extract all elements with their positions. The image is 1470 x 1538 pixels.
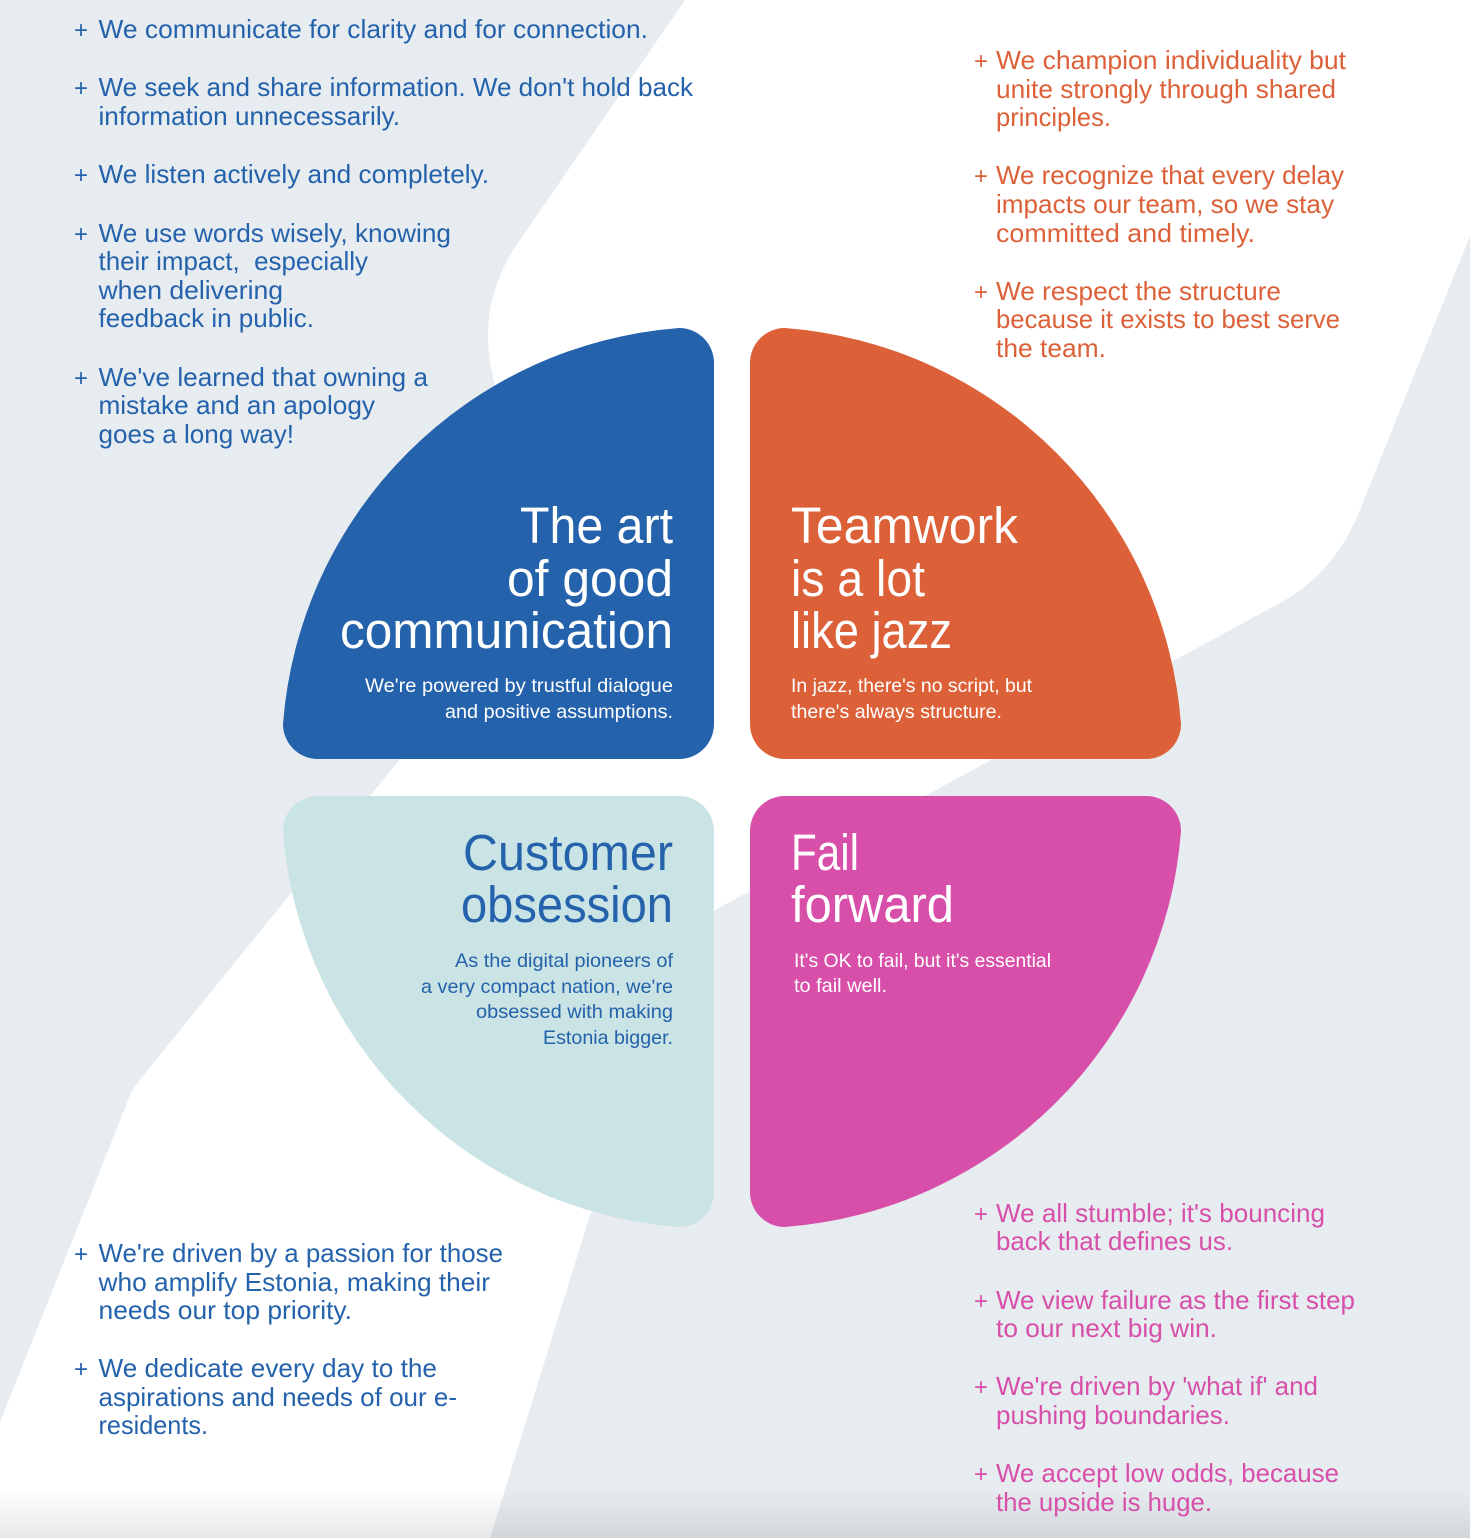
list: communication principles: + — [74, 17, 88, 44]
panel: the art of good communication — [283, 328, 714, 759]
description: communication: and positive assumptions. — [445, 701, 673, 723]
list: teamwork principles: + — [974, 279, 988, 306]
heading: Fail forward: Fail — [791, 824, 859, 881]
heading: Customer obsession: Customer — [463, 824, 673, 881]
list: fail forward principles — [974, 1198, 1355, 1517]
heading: Teamwork is a lot like jazz: is a lot — [791, 550, 925, 607]
list: fail forward principles: to our next big win. — [996, 1313, 1217, 1343]
heading: The art of good communication: The art — [520, 497, 673, 554]
list: customer principles: We dedicate every day to the — [98, 1353, 437, 1383]
list: teamwork principles: principles. — [996, 102, 1111, 132]
list: fail forward principles: + — [974, 1374, 988, 1401]
bottom shading — [0, 1488, 1470, 1538]
list: communication principles: their impact, especially — [98, 246, 368, 276]
list: communication principles: feedback in public. — [98, 303, 314, 333]
list: fail forward principles: back that defines us. — [996, 1226, 1233, 1256]
list: customer principles: aspirations and needs of our e- — [98, 1382, 457, 1412]
quadrant shape: orange — [750, 328, 1181, 759]
description: customer: a very compact nation, we're — [421, 976, 673, 998]
heading: Customer obsession — [461, 824, 673, 933]
list: teamwork principles: We respect the structure — [996, 276, 1281, 306]
list: communication principles: information unnecessarily. — [98, 101, 400, 131]
list: communication principles — [74, 14, 694, 449]
list: customer principles: We're driven by a passion for those — [98, 1238, 503, 1268]
list: communication principles: We communicate for clarity and for connection. — [98, 14, 648, 44]
list: fail forward principles: We view failure as the first step — [996, 1285, 1355, 1315]
heading: The art of good communication: communication — [340, 602, 673, 659]
description: fail forward: to fail well. — [794, 975, 887, 997]
list: teamwork principles: the team. — [996, 333, 1106, 363]
list: communication principles: We use words wisely, knowing — [98, 218, 451, 248]
heading: Customer obsession: obsession — [461, 876, 673, 933]
description: customer: Estonia bigger. — [543, 1027, 673, 1049]
list: customer principles: who amplify Estonia, making their — [97, 1267, 490, 1297]
list: communication principles: when delivering — [97, 275, 283, 305]
list: customer principles: residents. — [98, 1410, 208, 1440]
list: teamwork principles: We champion individuality but — [996, 45, 1347, 75]
list: communication principles: We listen actively and completely. — [98, 159, 489, 189]
description: teamwork: In jazz, there's no script, but — [791, 675, 1033, 697]
list: teamwork principles: We recognize that every delay — [996, 160, 1344, 190]
heading: Fail forward: forward — [791, 876, 954, 933]
list: customer principles: + — [74, 1356, 88, 1383]
description: communication: We're powered by trustful dialogue — [365, 675, 673, 697]
description: customer — [421, 950, 674, 1049]
description: customer: obsessed with making — [476, 1001, 673, 1023]
list: teamwork principles: + — [974, 163, 988, 190]
list: communication principles: mistake and an apology — [98, 390, 375, 420]
heading: The art of good communication: of good — [507, 550, 673, 607]
description: fail forward — [794, 950, 1051, 997]
description: teamwork — [791, 675, 1033, 723]
list: communication principles: + — [74, 162, 88, 189]
heading: Teamwork is a lot like jazz: like jazz — [791, 602, 952, 659]
list: fail forward principles: + — [974, 1461, 988, 1488]
list: teamwork principles: impacts our team, so we stay — [996, 189, 1334, 219]
list: fail forward principles: We accept low odds, because — [996, 1458, 1339, 1488]
quadrant shape: blue — [283, 328, 714, 759]
list: fail forward principles: We're driven by 'what if' and — [996, 1371, 1318, 1401]
background: upper-left grey shape — [0, 0, 685, 1422]
heading: Teamwork is a lot like jazz: Teamwork — [791, 497, 1018, 554]
list: customer principles: needs our top priority. — [98, 1295, 352, 1325]
description: customer: As the digital pioneers of — [455, 950, 674, 972]
description: communication — [365, 675, 673, 723]
list: customer principles: + — [74, 1241, 88, 1268]
panel: fail forward — [750, 796, 1181, 1227]
heading: Fail forward — [791, 824, 954, 933]
list: communication principles: We've learned that owning a — [98, 362, 429, 392]
panel: teamwork is a lot like jazz — [750, 328, 1181, 759]
list: teamwork principles: because it exists to best serve — [996, 304, 1340, 334]
list: fail forward principles: the upside is huge. — [996, 1487, 1212, 1517]
list: fail forward principles: We all stumble; it's bouncing — [996, 1198, 1325, 1228]
description: teamwork: there's always structure. — [791, 701, 1002, 723]
heading: Teamwork is a lot like jazz — [791, 497, 1018, 659]
list: fail forward principles: pushing boundaries. — [996, 1400, 1230, 1430]
list: fail forward principles: + — [974, 1288, 988, 1315]
panel: customer obsession — [283, 796, 714, 1227]
list: teamwork principles — [974, 45, 1347, 363]
list: teamwork principles: + — [974, 48, 988, 75]
list: communication principles: We seek and share information. We don't hold back — [98, 72, 694, 102]
list: teamwork principles: committed and timely. — [996, 218, 1255, 248]
heading: The art of good communication — [340, 497, 673, 659]
list: fail forward principles: + — [974, 1201, 988, 1228]
list: teamwork principles: unite strongly through shared — [996, 74, 1336, 104]
list: communication principles: + — [74, 365, 88, 392]
description: fail forward: It's OK to fail, but it's essential — [794, 950, 1051, 972]
quadrant shape: teal — [283, 796, 714, 1227]
list: customer principles — [74, 1238, 503, 1440]
list: communication principles: + — [74, 75, 88, 102]
quadrant shape: pink — [750, 796, 1181, 1227]
background: lower-right grey shape — [490, 236, 1470, 1538]
list: communication principles: goes a long way! — [98, 419, 294, 449]
list: communication principles: + — [74, 221, 88, 248]
